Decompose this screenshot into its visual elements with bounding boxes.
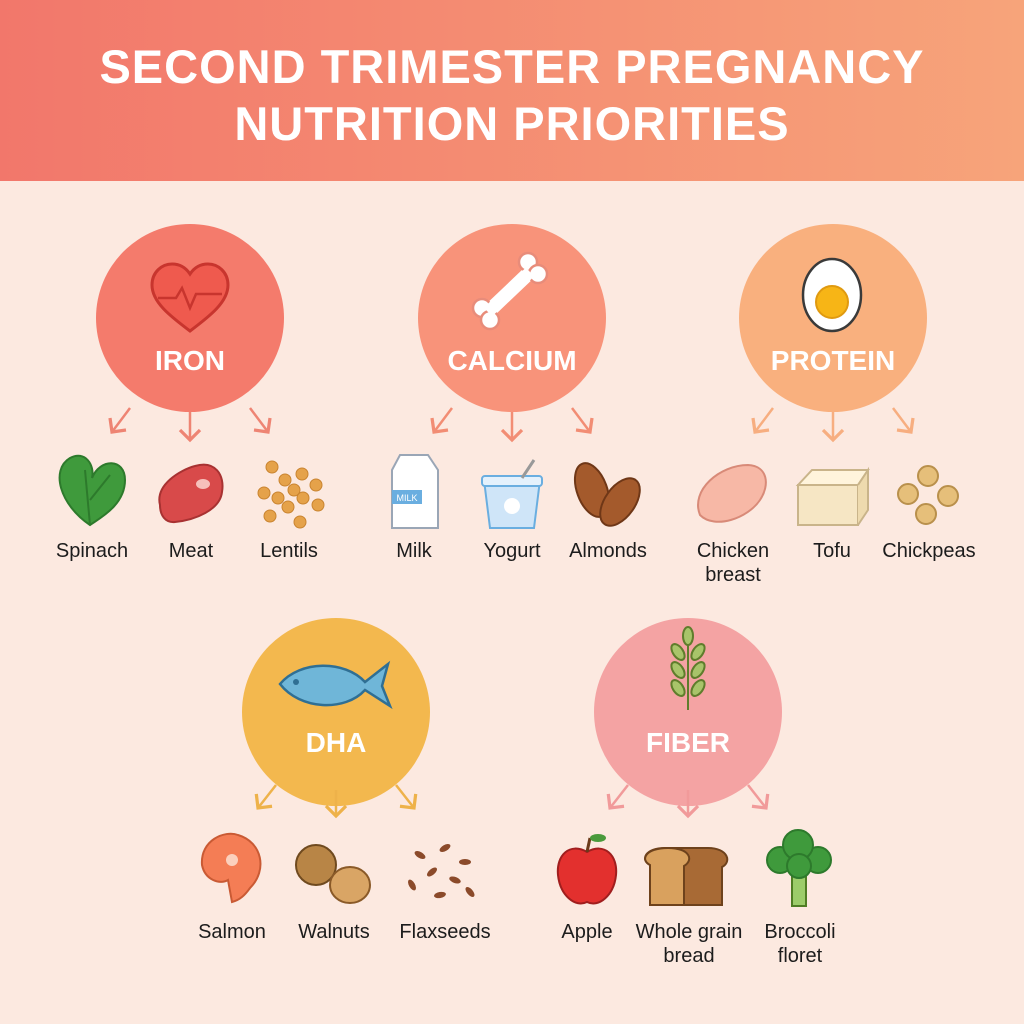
icon: tofu bbox=[798, 470, 868, 525]
labels: Milk bbox=[396, 540, 433, 562]
panel: protein bbox=[697, 224, 976, 586]
icon: chickpeas bbox=[898, 466, 958, 524]
panel: iron: IRON bbox=[155, 345, 225, 376]
icon: bread bbox=[645, 848, 727, 905]
labels: Apple bbox=[561, 921, 613, 943]
icon: broccoli bbox=[767, 830, 831, 906]
panel: dha: DHA bbox=[306, 727, 366, 758]
arrows bbox=[610, 785, 766, 816]
icon: yogurt bbox=[482, 460, 542, 528]
icon: chicken bbox=[698, 465, 766, 522]
labels: Lentils bbox=[260, 540, 318, 562]
icon: milk: MILK bbox=[396, 493, 418, 503]
labels bbox=[198, 921, 491, 943]
labels: bread bbox=[663, 945, 715, 967]
icon: almonds bbox=[568, 459, 648, 533]
icon: wheat bbox=[669, 627, 707, 710]
icon: lentils bbox=[258, 461, 324, 528]
labels: Whole grain bbox=[636, 921, 742, 943]
icon: fish bbox=[280, 664, 390, 706]
labels: floret bbox=[778, 945, 823, 967]
arrows bbox=[112, 408, 268, 440]
title: SECOND TRIMESTER PREGNANCY bbox=[99, 40, 925, 93]
labels: Broccoli bbox=[764, 921, 836, 943]
labels: Yogurt bbox=[483, 540, 541, 562]
labels: Chicken bbox=[697, 540, 769, 562]
icon: walnuts bbox=[296, 845, 370, 903]
panel: protein: PROTEIN bbox=[771, 345, 895, 376]
title: NUTRITION PRIORITIES bbox=[234, 97, 790, 150]
labels: Chickpeas bbox=[882, 540, 976, 562]
icon: apple bbox=[558, 834, 616, 903]
header bbox=[0, 0, 1024, 181]
labels: Spinach bbox=[56, 540, 128, 562]
panel: iron bbox=[56, 224, 324, 562]
icon: flaxseeds bbox=[406, 842, 476, 899]
icon: milk bbox=[392, 455, 438, 528]
labels: Meat bbox=[169, 540, 214, 562]
icon: heart bbox=[152, 264, 228, 331]
labels: Almonds bbox=[569, 540, 647, 562]
icon: spinach bbox=[60, 456, 125, 525]
labels bbox=[561, 921, 836, 967]
icon: meat bbox=[159, 465, 223, 522]
panel: calcium bbox=[392, 224, 648, 562]
labels bbox=[697, 540, 976, 586]
labels: Flaxseeds bbox=[399, 921, 491, 943]
arrows bbox=[258, 785, 414, 816]
labels: breast bbox=[705, 564, 761, 586]
panel: calcium: CALCIUM bbox=[447, 345, 577, 376]
arrows bbox=[755, 408, 911, 440]
title bbox=[99, 40, 925, 150]
panel: fiber bbox=[558, 618, 836, 967]
labels: Walnuts bbox=[298, 921, 370, 943]
labels bbox=[396, 540, 647, 562]
icon: bone bbox=[473, 253, 547, 329]
panel: dha bbox=[198, 618, 491, 943]
panel: fiber: FIBER bbox=[646, 727, 730, 758]
icon: salmon bbox=[202, 834, 260, 902]
icon: egg bbox=[803, 259, 861, 331]
labels bbox=[56, 540, 318, 562]
labels: Tofu bbox=[813, 540, 851, 562]
arrows bbox=[434, 408, 590, 440]
labels: Salmon bbox=[198, 921, 266, 943]
